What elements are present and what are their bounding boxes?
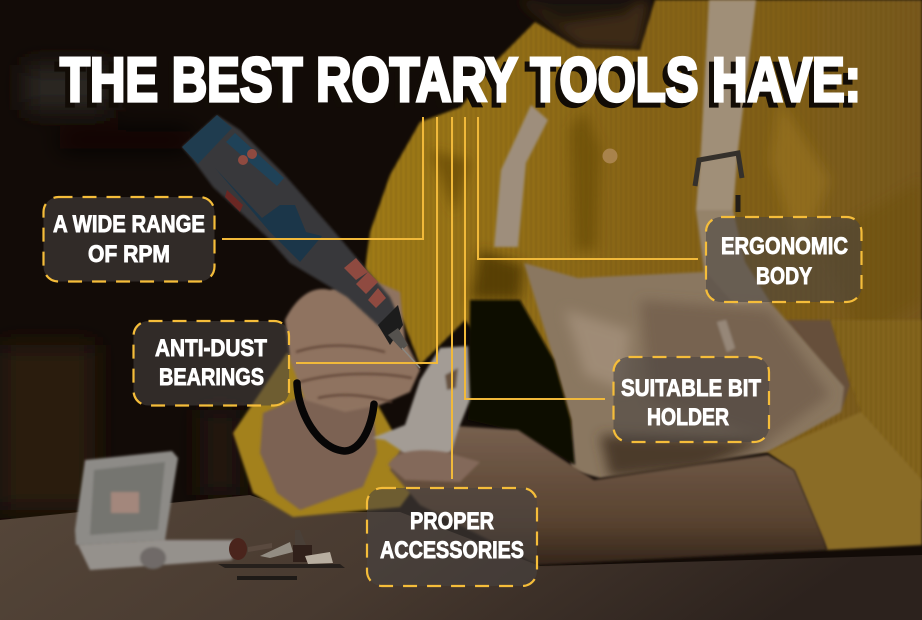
plastic accessories case: [75, 451, 235, 570]
right forearm: [390, 425, 827, 565]
callout: anti-dust bearings: ANTI-DUST: [155, 335, 267, 362]
callout: a wide range of RPM: [44, 197, 214, 282]
apron shading: [565, 300, 830, 478]
shirt button: [602, 148, 618, 164]
callout: anti-dust bearings: BEARINGS: [159, 364, 264, 391]
neck and beard: [520, 0, 650, 50]
rotary tool: [182, 115, 420, 368]
callout: proper accessories: PROPER: [410, 508, 494, 535]
shirt: [362, 0, 922, 500]
callout: suitable bit holder: HOLDER: [647, 404, 729, 431]
callout: suitable bit holder: SUITABLE BIT: [621, 375, 761, 402]
callout: proper accessories: [367, 488, 537, 586]
callout: ergonomic body: [706, 217, 862, 302]
right sleeve: [768, 320, 922, 550]
left hand fingers: [296, 346, 412, 402]
callout: a wide range of RPM: OF RPM: [88, 241, 170, 268]
bracelet: [297, 383, 374, 451]
left sleeve: [233, 353, 420, 517]
callout: ergonomic body: BODY: [756, 263, 812, 290]
apron: [494, 0, 850, 478]
left hand: [285, 278, 420, 412]
figurine: [372, 346, 470, 470]
left forearm: [260, 397, 377, 510]
callout: a wide range of RPM: A WIDE RANGE: [53, 211, 205, 238]
dark gap between arm and apron: [468, 300, 575, 465]
strap buckle: [695, 153, 742, 212]
connector lines: [222, 117, 698, 479]
callout: ergonomic body: ERGONOMIC: [721, 233, 848, 260]
shirt folds: [430, 100, 922, 340]
callout: proper accessories: ACCESSORIES: [380, 537, 524, 564]
callout: anti-dust bearings: [134, 321, 289, 406]
drill bits on the table: [218, 530, 345, 580]
callout: suitable bit holder: [614, 357, 769, 442]
right hand fingers: [388, 450, 480, 482]
table: [0, 495, 922, 620]
